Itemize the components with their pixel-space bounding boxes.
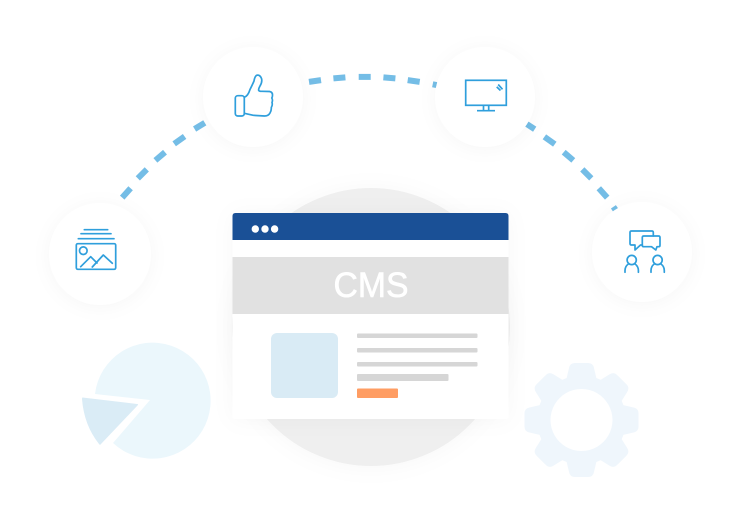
- icon: two people talking: [625, 231, 664, 272]
- text placeholder lines: [357, 334, 478, 381]
- icon: thumbs up: [235, 75, 272, 116]
- gear decoration: [524, 363, 638, 477]
- node: images: [49, 203, 151, 305]
- heading: CMS: CMS: [334, 266, 408, 305]
- window control dots: [252, 225, 278, 233]
- orange button: [357, 388, 398, 398]
- background circle: [232, 188, 510, 466]
- node: like: [203, 47, 303, 147]
- node: screen: [435, 47, 535, 147]
- icon: monitor: [466, 80, 506, 111]
- node: conversation: [592, 202, 692, 302]
- icon: stacked image: [76, 230, 116, 269]
- dashed arc connecting channels: [122, 77, 617, 212]
- pie chart decoration: [82, 343, 211, 459]
- image placeholder: [271, 333, 338, 398]
- CMS banner: [232, 257, 508, 314]
- panel: CMS browser window: [232, 213, 508, 419]
- browser title bar: [232, 213, 508, 240]
